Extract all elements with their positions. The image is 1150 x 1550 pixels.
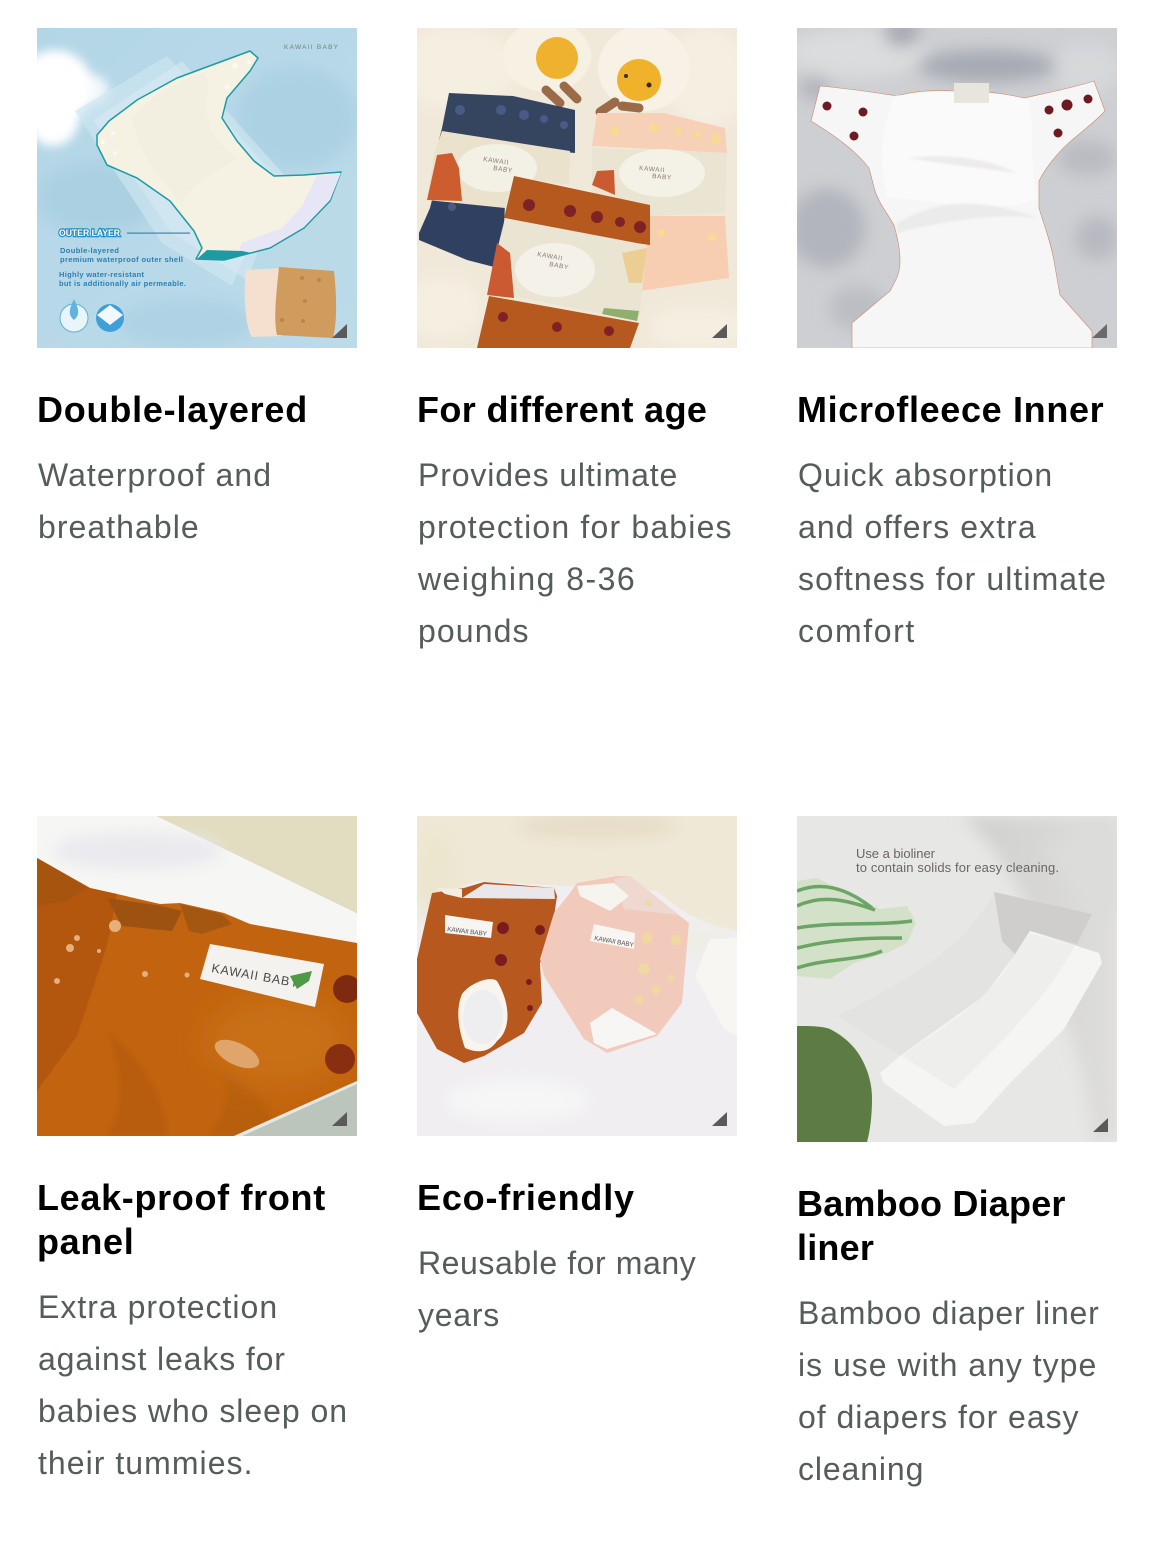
labels: brand on bands: BABY <box>652 173 672 182</box>
label: kawaii baby tag: KAWAII BABY <box>210 961 300 990</box>
text: eco-friendly description <box>418 1245 696 1333</box>
heading: leak-proof front panel: Leak-proof front <box>37 1177 326 1218</box>
caption: use a bioliner: Use a bioliner <box>856 846 936 861</box>
fabric folds <box>37 858 347 1136</box>
heading: for different age: For different age <box>417 389 707 430</box>
labels: brand on bands: BABY <box>549 261 569 271</box>
text: leak-proof description: babies who sleep on <box>38 1393 348 1429</box>
label: outer layer text: premium waterproof outer shell <box>60 255 183 264</box>
labels: brand on bands: KAWAII <box>537 251 563 262</box>
text: bamboo description: Bamboo diaper liner <box>798 1295 1100 1331</box>
navy diaper <box>419 93 575 269</box>
liner film <box>837 892 1092 1089</box>
pink diaper: KAWAII BABY <box>594 935 635 949</box>
text: bamboo description: cleaning <box>798 1451 924 1487</box>
rust diaper <box>477 176 650 348</box>
text: microfleece description: softness for ultimate <box>798 561 1107 597</box>
label: outer layer text: KAWAII BABY <box>284 44 339 51</box>
labels: brand on bands: KAWAII <box>483 156 509 167</box>
text: microfleece description: Quick absorption <box>798 457 1053 493</box>
diaper shape <box>97 51 341 260</box>
heading: bamboo diaper liner <box>797 1183 1066 1268</box>
label: outer layer text: OUTER LAYER <box>59 228 120 238</box>
text: bamboo description: of diapers for easy <box>798 1399 1080 1435</box>
image: double-layered diaper <box>37 28 357 348</box>
label: outer layer text <box>59 44 339 288</box>
text: microfleece description: comfort <box>798 613 916 649</box>
icons: water drop and layers <box>60 299 124 332</box>
text: different age description: pounds <box>418 613 530 649</box>
label: outer layer text: Double-layered <box>60 246 119 255</box>
rust diaper <box>417 882 557 1063</box>
image: leak-proof front panel <box>37 816 357 1136</box>
text: different age description: Provides ultimate <box>418 457 678 493</box>
plush toys <box>503 20 690 112</box>
caption: use a bioliner: to contain solids for easy cleaning. <box>856 860 1059 875</box>
image: different age diapers <box>417 28 737 348</box>
label: outer layer text: but is additionally air permeable. <box>59 279 186 288</box>
text: eco-friendly description: Reusable for many <box>418 1245 696 1281</box>
text: leak-proof description: against leaks for <box>38 1341 286 1377</box>
text: double-layered description <box>38 457 272 545</box>
text: microfleece description <box>798 457 1107 649</box>
pink diaper <box>540 876 689 1053</box>
heading: eco-friendly: Eco-friendly <box>417 1177 635 1218</box>
text: bamboo description <box>798 1295 1100 1487</box>
folded towel <box>695 938 737 1036</box>
swatches: pink and tan diapers <box>245 267 336 338</box>
text: leak-proof description: Extra protection <box>38 1289 278 1325</box>
heading: leak-proof front panel <box>37 1177 326 1262</box>
heading: leak-proof front panel: panel <box>37 1221 134 1262</box>
leaf: solid green <box>797 1026 872 1142</box>
heading: bamboo diaper liner: Bamboo Diaper <box>797 1183 1066 1224</box>
image: microfleece inner <box>797 28 1117 348</box>
text: different age description <box>418 457 733 649</box>
text: double-layered description: Waterproof and <box>38 457 272 493</box>
text: leak-proof description <box>38 1289 348 1481</box>
text: leak-proof description: their tummies. <box>38 1445 254 1481</box>
peach diaper <box>592 113 729 291</box>
image: bamboo diaper liner <box>797 816 1117 1142</box>
text: double-layered description: breathable <box>38 509 200 545</box>
rust diaper: KAWAII BABY <box>447 926 488 938</box>
text: different age description: weighing 8-36 <box>418 561 636 597</box>
heading: microfleece inner: Microfleece Inner <box>797 389 1104 430</box>
text: microfleece description: and offers extra <box>798 509 1037 545</box>
label: kawaii baby tag <box>200 944 324 1007</box>
labels: brand on bands: BABY <box>493 165 513 175</box>
text: eco-friendly description: years <box>418 1297 500 1333</box>
heading: double-layered: Double-layered <box>37 389 308 430</box>
labels: brand on bands <box>483 156 672 271</box>
image: eco-friendly diapers <box>417 816 737 1136</box>
text: bamboo description: is use with any type <box>798 1347 1097 1383</box>
text: different age description: protection for babies <box>418 509 733 545</box>
label: outer layer text: Highly water-resistant <box>59 270 144 279</box>
heading: bamboo diaper liner: liner <box>797 1227 874 1268</box>
liner pad <box>880 931 1102 1126</box>
labels: brand on bands: KAWAII <box>639 165 665 174</box>
leaf: striped <box>797 878 916 979</box>
caption: use a bioliner <box>856 846 1059 875</box>
